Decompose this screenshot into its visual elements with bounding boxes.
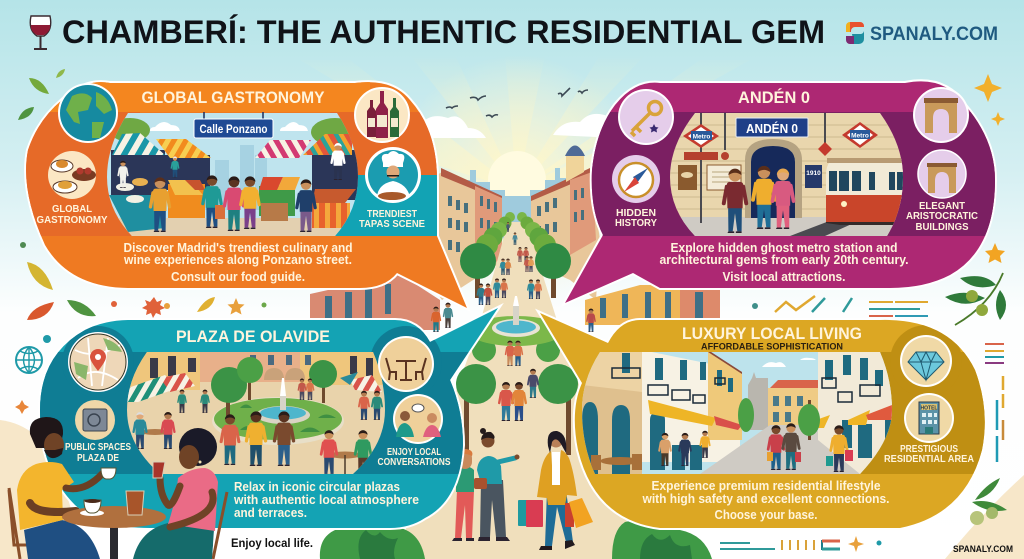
bushes	[320, 520, 712, 559]
icon label: enjoy local conversations: ENJOY LOCAL	[387, 447, 441, 458]
icon label: trendiest tapas scene: TAPAS SCENE	[359, 219, 425, 230]
icon label: elegant aristocratic buildings	[906, 201, 978, 233]
lower right buildings	[585, 285, 720, 325]
icon label: trendiest tapas scene: TRENDIEST	[367, 209, 417, 220]
body text	[660, 241, 908, 284]
shopper: girl in green	[452, 449, 474, 541]
skyline	[462, 168, 575, 240]
panel: luxury local living	[530, 300, 1000, 535]
body text: and terraces.	[234, 506, 307, 520]
station sign: ANDÉN 0	[746, 121, 798, 136]
icon: map pin	[68, 332, 128, 392]
body text	[123, 241, 352, 284]
icon: hotel	[904, 393, 954, 443]
title: CHAMBERÍ: THE AUTHENTIC RESIDENTIAL GEM	[62, 14, 825, 50]
icon: hotel: HOTEL	[921, 406, 937, 412]
shopper: woman in yellow jacket	[518, 431, 593, 550]
icon: arch	[913, 87, 969, 143]
road	[395, 222, 640, 559]
icon label: elegant aristocratic buildings: BUILDINGS	[916, 222, 969, 233]
body text: Visit local attractions.	[722, 270, 846, 284]
icon: cafe table	[378, 336, 434, 392]
metro scene: Metro	[851, 132, 869, 140]
body text: with high safety and excellent connections.	[642, 492, 890, 506]
man with coffee	[9, 417, 116, 559]
icon label: trendiest tapas scene	[359, 209, 425, 230]
panel: global gastronomy	[24, 80, 467, 308]
icon label: prestigious residential area: PRESTIGIOUS	[900, 444, 958, 455]
trees: upper avenue	[460, 212, 571, 298]
shopping street scene	[580, 350, 895, 480]
logo wordmark: SPANALY.COM	[870, 24, 998, 45]
street sign	[194, 112, 273, 138]
decorations: right stars and charts	[720, 74, 1007, 552]
icon: wine bottles	[355, 88, 409, 142]
icon label: public spaces plaza de: PUBLIC SPACES	[65, 442, 131, 453]
icon: diamond	[900, 335, 952, 387]
icon label: elegant aristocratic buildings: ELEGANT	[919, 201, 965, 212]
metro scene: 1910	[806, 170, 821, 177]
body text	[233, 480, 419, 520]
icon: safe	[75, 400, 115, 440]
street sign: Calle Ponzano	[200, 124, 268, 136]
icon label: prestigious residential area	[884, 444, 974, 465]
body text: with authentic local atmosphere	[233, 493, 419, 507]
body text: Relax in iconic circular plazas	[234, 480, 400, 494]
body text: Consult our food guide.	[171, 270, 305, 284]
icon label: hidden history	[615, 208, 657, 229]
subheading: AFFORDABLE SOPHISTICATION	[701, 342, 843, 352]
icon: tapas plates	[48, 151, 96, 199]
illustration: couple at cafe table	[9, 417, 227, 559]
body text: wine experiences along Ponzano street.	[123, 253, 352, 267]
icon label: public spaces plaza de: PLAZA DE	[77, 453, 119, 464]
heading: GLOBAL GASTRONOMY	[142, 89, 324, 107]
icon: compass	[612, 155, 660, 203]
heading: LUXURY LOCAL LIVING	[682, 325, 862, 343]
icon: globe	[58, 83, 118, 143]
icon label: enjoy local conversations	[378, 447, 451, 468]
shopper: woman with teal top	[474, 428, 520, 541]
woman with drink	[133, 428, 227, 559]
birds	[446, 88, 588, 117]
icon label: enjoy local conversations: CONVERSATIONS	[378, 457, 451, 468]
plaza scene	[120, 350, 390, 476]
heading: PLAZA DE OLAVIDE	[176, 328, 330, 346]
lower left buildings	[310, 274, 440, 330]
icon label: public spaces plaza de	[65, 442, 131, 464]
body text: Discover Madrid's trendiest culinary and	[124, 241, 352, 255]
buildings: left avenue	[428, 172, 502, 300]
buildings: right avenue	[531, 172, 600, 300]
body text: Experience premium residential lifestyle	[652, 479, 881, 493]
metro scene	[670, 113, 903, 236]
market scene	[107, 113, 358, 236]
body text: Explore hidden ghost metro station and	[670, 241, 898, 255]
source credit: SPANALY.COM	[953, 544, 1013, 555]
heading: ANDÉN 0	[738, 88, 810, 107]
metro scene: Metro	[693, 134, 710, 140]
icon: chef	[365, 147, 421, 203]
icon label: hidden history: HISTORY	[615, 218, 657, 229]
trees: lower avenue	[456, 338, 578, 455]
body text: Choose your base.	[714, 508, 818, 522]
icon label: global gastronomy: GASTRONOMY	[36, 215, 108, 226]
icon label: hidden history: HIDDEN	[616, 208, 656, 219]
icon: wine glass	[30, 16, 51, 49]
icon label: prestigious residential area: RESIDENTIAL AREA	[884, 454, 974, 465]
body text	[642, 479, 890, 522]
icon label: global gastronomy: GLOBAL	[52, 204, 92, 215]
icon: key	[618, 89, 674, 145]
body text: architectural gems from early 20th century.	[660, 253, 908, 267]
table with drinks	[62, 491, 166, 559]
icon: aristocratic building	[918, 150, 966, 198]
decorations: left leaves and dots	[15, 69, 266, 414]
closing line: Enjoy local life.	[231, 536, 313, 550]
logo icon	[846, 22, 864, 44]
fountain	[468, 296, 564, 346]
street scene: central boulevard	[310, 88, 720, 559]
icon label: global gastronomy	[36, 204, 108, 226]
strollers on the avenue	[432, 222, 595, 421]
panel: anden 0	[565, 79, 997, 303]
station sign	[736, 118, 808, 137]
icon label: elegant aristocratic buildings: ARISTOCRATIC	[906, 211, 978, 222]
icon: conversation	[393, 394, 443, 444]
panel: plaza de olavide	[30, 300, 510, 530]
